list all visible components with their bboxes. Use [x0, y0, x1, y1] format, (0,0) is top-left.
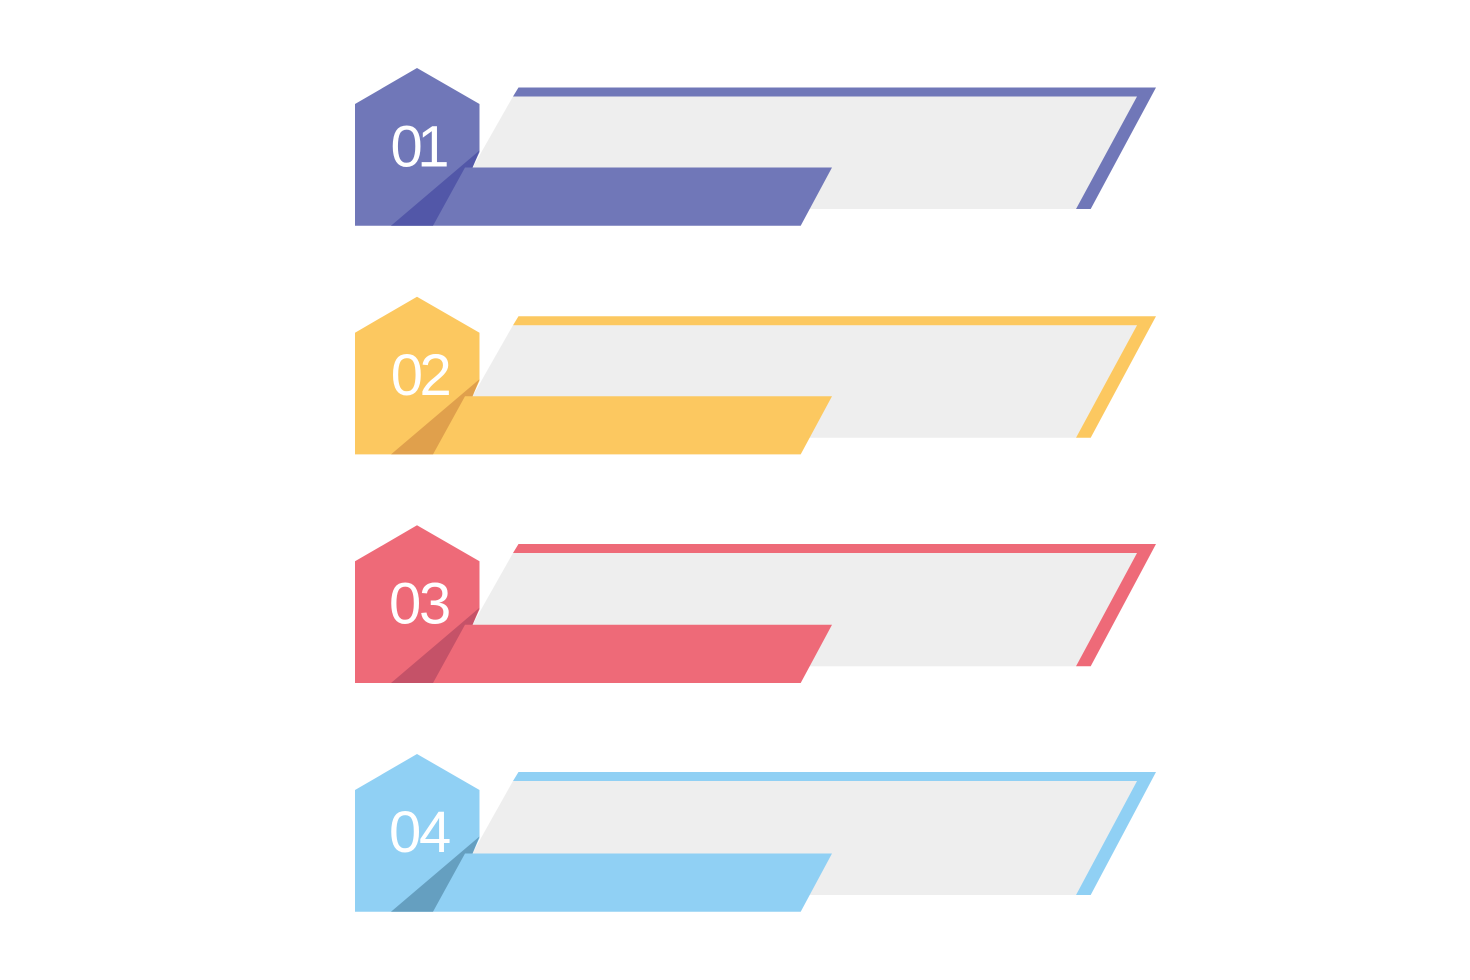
number 02: 02 [391, 343, 452, 408]
banner 04 [355, 754, 1156, 912]
banner 03 [355, 525, 1156, 683]
banner 01 [355, 68, 1156, 226]
hexagon badge with lower bar 04 [355, 754, 832, 912]
outline band 01 [513, 88, 1156, 209]
number 04: 04 [389, 800, 451, 865]
outline band 04 [513, 772, 1156, 895]
panel: grey parallelogram 03 [449, 553, 1137, 666]
panel: grey parallelogram 02 [449, 325, 1137, 438]
panel: grey parallelogram 04 [449, 781, 1137, 895]
number 01: 01 [390, 114, 450, 180]
fold shadow 01 [391, 150, 480, 226]
panel: grey parallelogram 01 [449, 96, 1137, 209]
banner 02 [355, 297, 1156, 454]
hexagon badge with lower bar 02 [355, 297, 832, 454]
hexagon badge with lower bar 01 [355, 68, 832, 226]
fold shadow 04 [391, 836, 480, 912]
fold shadow 02 [391, 379, 480, 454]
fold shadow 03 [391, 608, 480, 683]
hexagon badge with lower bar 03 [355, 525, 832, 683]
outline band 03 [513, 544, 1156, 666]
outline band 02 [513, 316, 1156, 438]
number 03: 03 [389, 571, 451, 636]
